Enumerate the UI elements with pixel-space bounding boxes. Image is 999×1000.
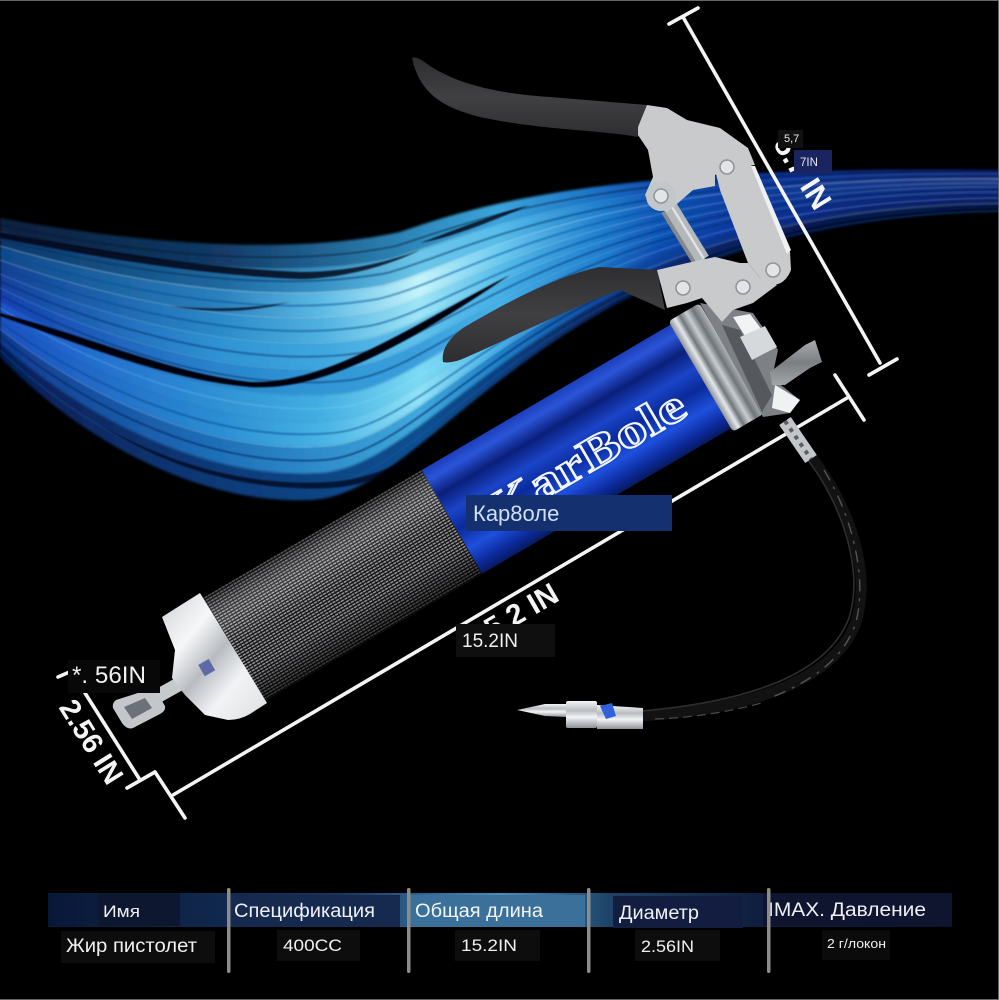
carbon grip <box>198 469 484 704</box>
dimension: length 15.2 IN <box>155 375 864 818</box>
value cell: 15.2IN <box>455 930 540 961</box>
dimension: height 5.7 IN <box>669 8 897 375</box>
blue barrel <box>422 324 733 574</box>
header cell: IMAX. Давление <box>763 893 952 926</box>
value cell: 400CC: 400CC <box>283 936 342 955</box>
header cell: Имя: Имя <box>103 902 140 921</box>
dimension: diameter 2.56 IN <box>58 670 155 788</box>
grease gun body <box>196 303 764 708</box>
overlay label: 2.56 top <box>68 660 160 693</box>
T handle <box>113 689 165 728</box>
rotated label: 5.7 IN: 5.7 IN <box>767 130 837 216</box>
collar around pivot <box>646 181 676 211</box>
header cell: Имя <box>98 893 180 926</box>
grease elbow fitting <box>770 340 822 385</box>
silver lever plates <box>638 105 791 322</box>
overlay label: 15.2IN: 15.2IN <box>462 631 518 652</box>
T handle plunger rod <box>140 678 190 706</box>
value cell: 15.2IN: 15.2IN <box>461 936 517 955</box>
value cell: 400CC <box>277 930 360 961</box>
overlay label: 7IN <box>794 150 832 173</box>
value cell: 2.56IN <box>635 930 720 961</box>
dimension lines <box>58 8 897 818</box>
header cell: Спецификация: Спецификация <box>234 901 375 922</box>
nozzle blue spot <box>600 703 616 719</box>
blue hair swoosh <box>0 170 999 500</box>
header cell: Общая длина <box>410 895 585 927</box>
end cap <box>162 593 267 720</box>
overlay label: 5,7 <box>778 130 803 148</box>
value cell: 2.56IN: 2.56IN <box>641 937 694 956</box>
lower black lever grip <box>443 267 665 362</box>
hose connector <box>785 421 811 459</box>
value cell: Жир пистолет: Жир пистолет <box>66 936 197 957</box>
plate rivets <box>654 160 780 295</box>
overlay label: 7IN: 7IN <box>800 157 818 169</box>
rotated label: 15.2 IN: 15.2 IN <box>464 577 564 654</box>
overlay label: brand: Кар8оле <box>473 501 559 526</box>
swoosh dark slits <box>0 205 530 488</box>
value cell: 2 г/локон <box>822 930 890 960</box>
overlay label: 5,7: 5,7 <box>784 133 799 145</box>
upper black lever grip <box>412 57 647 137</box>
lever rod <box>663 207 704 264</box>
overlay label: 15.2IN <box>456 624 555 657</box>
overlay label: 2.56 top: *. 56IN <box>72 662 146 689</box>
grease hose <box>640 458 861 719</box>
cap blue reflection <box>198 659 215 676</box>
specification table <box>48 888 952 973</box>
front valve head <box>700 303 822 459</box>
swoosh hair strands <box>0 172 999 487</box>
overlay label: brand <box>466 495 672 531</box>
table header band <box>48 893 952 927</box>
rotated label: 2.56 IN: 2.56 IN <box>52 694 129 790</box>
header cell: Общая длина: Общая длина <box>415 901 543 922</box>
header cell: Диаметр: Диаметр <box>619 903 699 924</box>
header cell: Спецификация <box>230 895 400 927</box>
header cell: Диаметр <box>613 896 743 928</box>
value cell: 2 г/локон: 2 г/локон <box>827 937 886 951</box>
barrel logo: KarBole <box>477 379 694 535</box>
clear ring <box>668 303 764 432</box>
header cell: IMAX. Давление: IMAX. Давление <box>768 900 926 921</box>
value cell: Жир пистолет <box>61 931 215 963</box>
grease nozzle <box>517 701 643 729</box>
